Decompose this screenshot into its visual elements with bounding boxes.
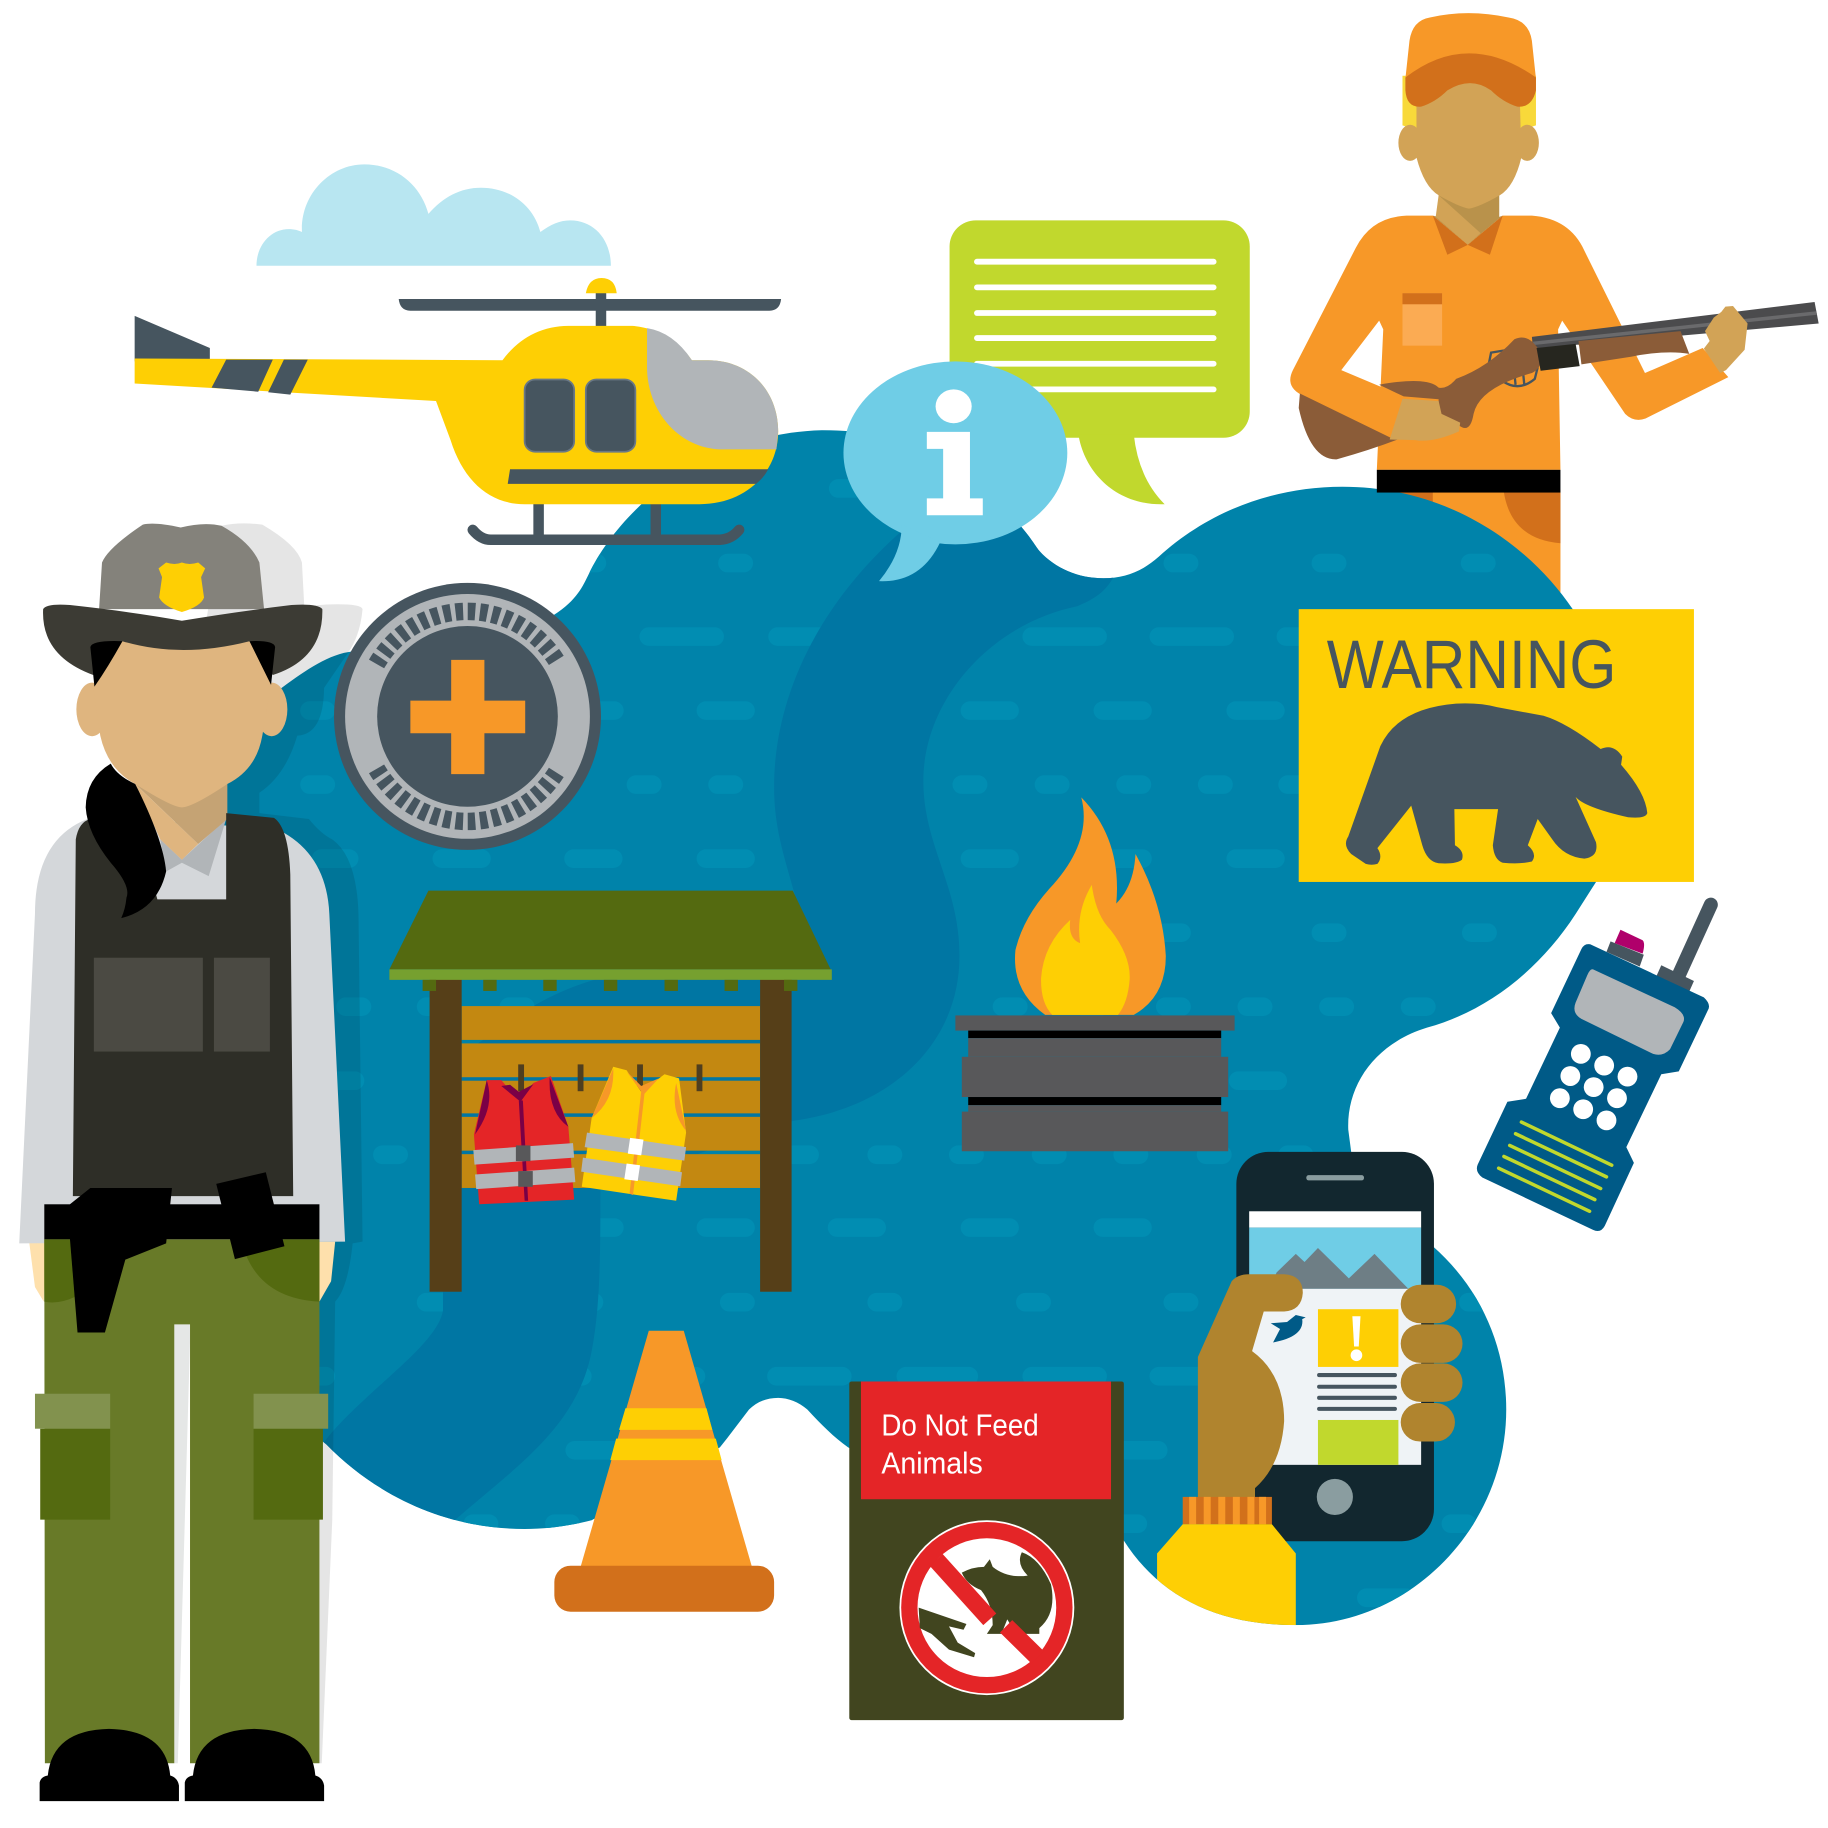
darker blue wave bbox=[324, 526, 1114, 1520]
ranger hat bbox=[43, 524, 322, 687]
ranger head bbox=[76, 635, 287, 807]
yellow life vest bbox=[581, 1067, 686, 1201]
do not feed animals sign: Animals bbox=[881, 1448, 983, 1481]
red life vest bbox=[473, 1076, 575, 1204]
ranger shadow bbox=[175, 523, 363, 1763]
ranger neck bbox=[135, 784, 227, 860]
park ranger bbox=[19, 524, 345, 1801]
ranger boots bbox=[40, 1729, 324, 1801]
ranger trousers bbox=[35, 1239, 328, 1763]
icon: bear bbox=[1346, 703, 1647, 865]
first aid medallion bbox=[334, 583, 601, 850]
pill pattern bbox=[300, 479, 1497, 1607]
fire pit bbox=[955, 797, 1235, 1151]
do not feed animals sign bbox=[849, 1381, 1124, 1720]
helicopter bbox=[135, 278, 781, 540]
smartphone in hand bbox=[1183, 1152, 1463, 1541]
cloud bbox=[256, 164, 611, 266]
ranger shirt and hands bbox=[19, 819, 345, 1302]
flame bbox=[1015, 797, 1166, 1015]
hunter bbox=[1290, 13, 1819, 493]
shelter with life vests bbox=[389, 891, 832, 1292]
do not feed animals sign: Do Not Feed bbox=[881, 1410, 1039, 1443]
green speech bubble bbox=[950, 220, 1250, 504]
yellow sleeve bbox=[1157, 1524, 1296, 1632]
prohibition icon bbox=[899, 1520, 1074, 1695]
radio bbox=[1477, 905, 1711, 1231]
blue background blob bbox=[176, 430, 1596, 1626]
hunter legs behind background bbox=[1379, 490, 1560, 600]
warning sign bbox=[1299, 609, 1694, 882]
ranger vest bbox=[73, 813, 293, 1196]
ranger belt and holster bbox=[44, 1172, 319, 1333]
traffic cone bbox=[554, 1331, 774, 1612]
ranger hair bbox=[86, 764, 166, 918]
warning sign: WARNING bbox=[1327, 626, 1616, 703]
info bubble bbox=[843, 361, 1067, 581]
